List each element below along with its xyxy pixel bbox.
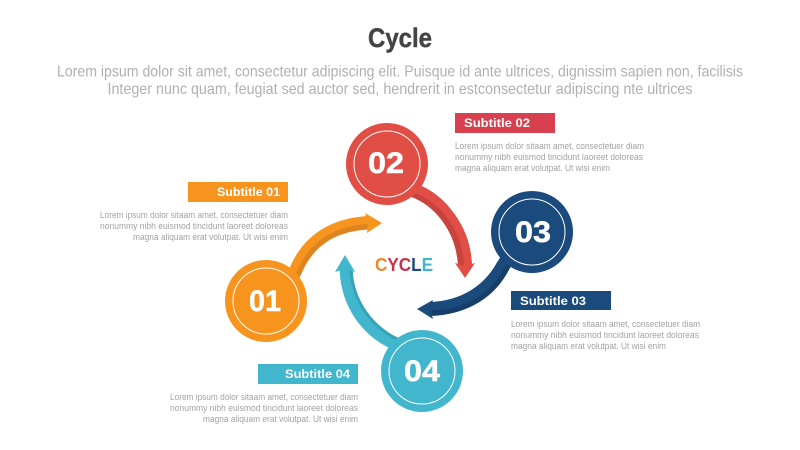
step 02 circle	[346, 123, 428, 205]
text block 02: nonummy nibh euismod tincidunt laoreet doloreas	[455, 152, 643, 162]
subtitle 01: Subtitle 01	[217, 185, 280, 199]
text block 02	[455, 141, 644, 173]
text block 03: nonummy nibh euismod tincidunt laoreet doloreas	[511, 330, 699, 340]
step 01 circle: 01	[249, 285, 281, 318]
step 04 circle	[381, 330, 463, 412]
text block 04: Lorem ipsum dolor sitaam amet, consectetuer diam	[170, 392, 358, 402]
step 03 circle: 03	[515, 216, 551, 249]
intro text: Integer nunc quam, feugiat sed auctor sed, hendrerit in estconsectetur adipiscing nte ultrices	[108, 81, 692, 98]
subtitle 02: Subtitle 02	[464, 116, 530, 130]
step 03 circle	[491, 191, 573, 273]
text block 01: Lorem ipsum dolor sitaam amet, consectetuer diam	[100, 210, 288, 220]
text block 01: magna aliquam erat volutpat. Ut wisi enim	[133, 232, 288, 242]
subtitle 02	[455, 113, 555, 133]
subtitle 04: Subtitle 04	[285, 367, 350, 381]
text block 04: nonummy nibh euismod tincidunt laoreet doloreas	[170, 403, 358, 413]
arrow: 03 navy	[417, 244, 521, 319]
subtitle 01	[188, 182, 288, 202]
step 04 circle: 04	[404, 355, 440, 388]
text block 03: magna aliquam erat volutpat. Ut wisi enim	[511, 341, 666, 351]
arrow: 02 red	[395, 180, 475, 278]
step 01 circle	[225, 260, 307, 342]
text block 03	[511, 319, 700, 351]
text block 03: Lorem ipsum dolor sitaam amet, consectetuer diam	[511, 319, 700, 329]
text block 02: magna aliquam erat volutpat. Ut wisi enim	[455, 163, 610, 173]
text block 02: Lorem ipsum dolor sitaam amet, consectetuer diam	[455, 141, 644, 151]
text block 01: nonummy nibh euismod tincidunt laoreet doloreas	[100, 221, 288, 231]
intro text	[57, 64, 743, 98]
text block 04	[170, 392, 358, 424]
subtitle 03: Subtitle 03	[520, 294, 586, 308]
step 02 circle: 02	[368, 147, 404, 180]
center label: CYCLE: CYCLE	[375, 255, 433, 275]
arrow: 01 orange	[283, 213, 382, 292]
text block 01	[100, 210, 288, 242]
subtitle 04	[258, 364, 358, 384]
arrow: 04 teal	[335, 255, 415, 352]
subtitle 03	[511, 291, 611, 310]
text block 04: magna aliquam erat volutpat. Ut wisi enim	[203, 414, 358, 424]
title: Cycle	[368, 23, 432, 53]
